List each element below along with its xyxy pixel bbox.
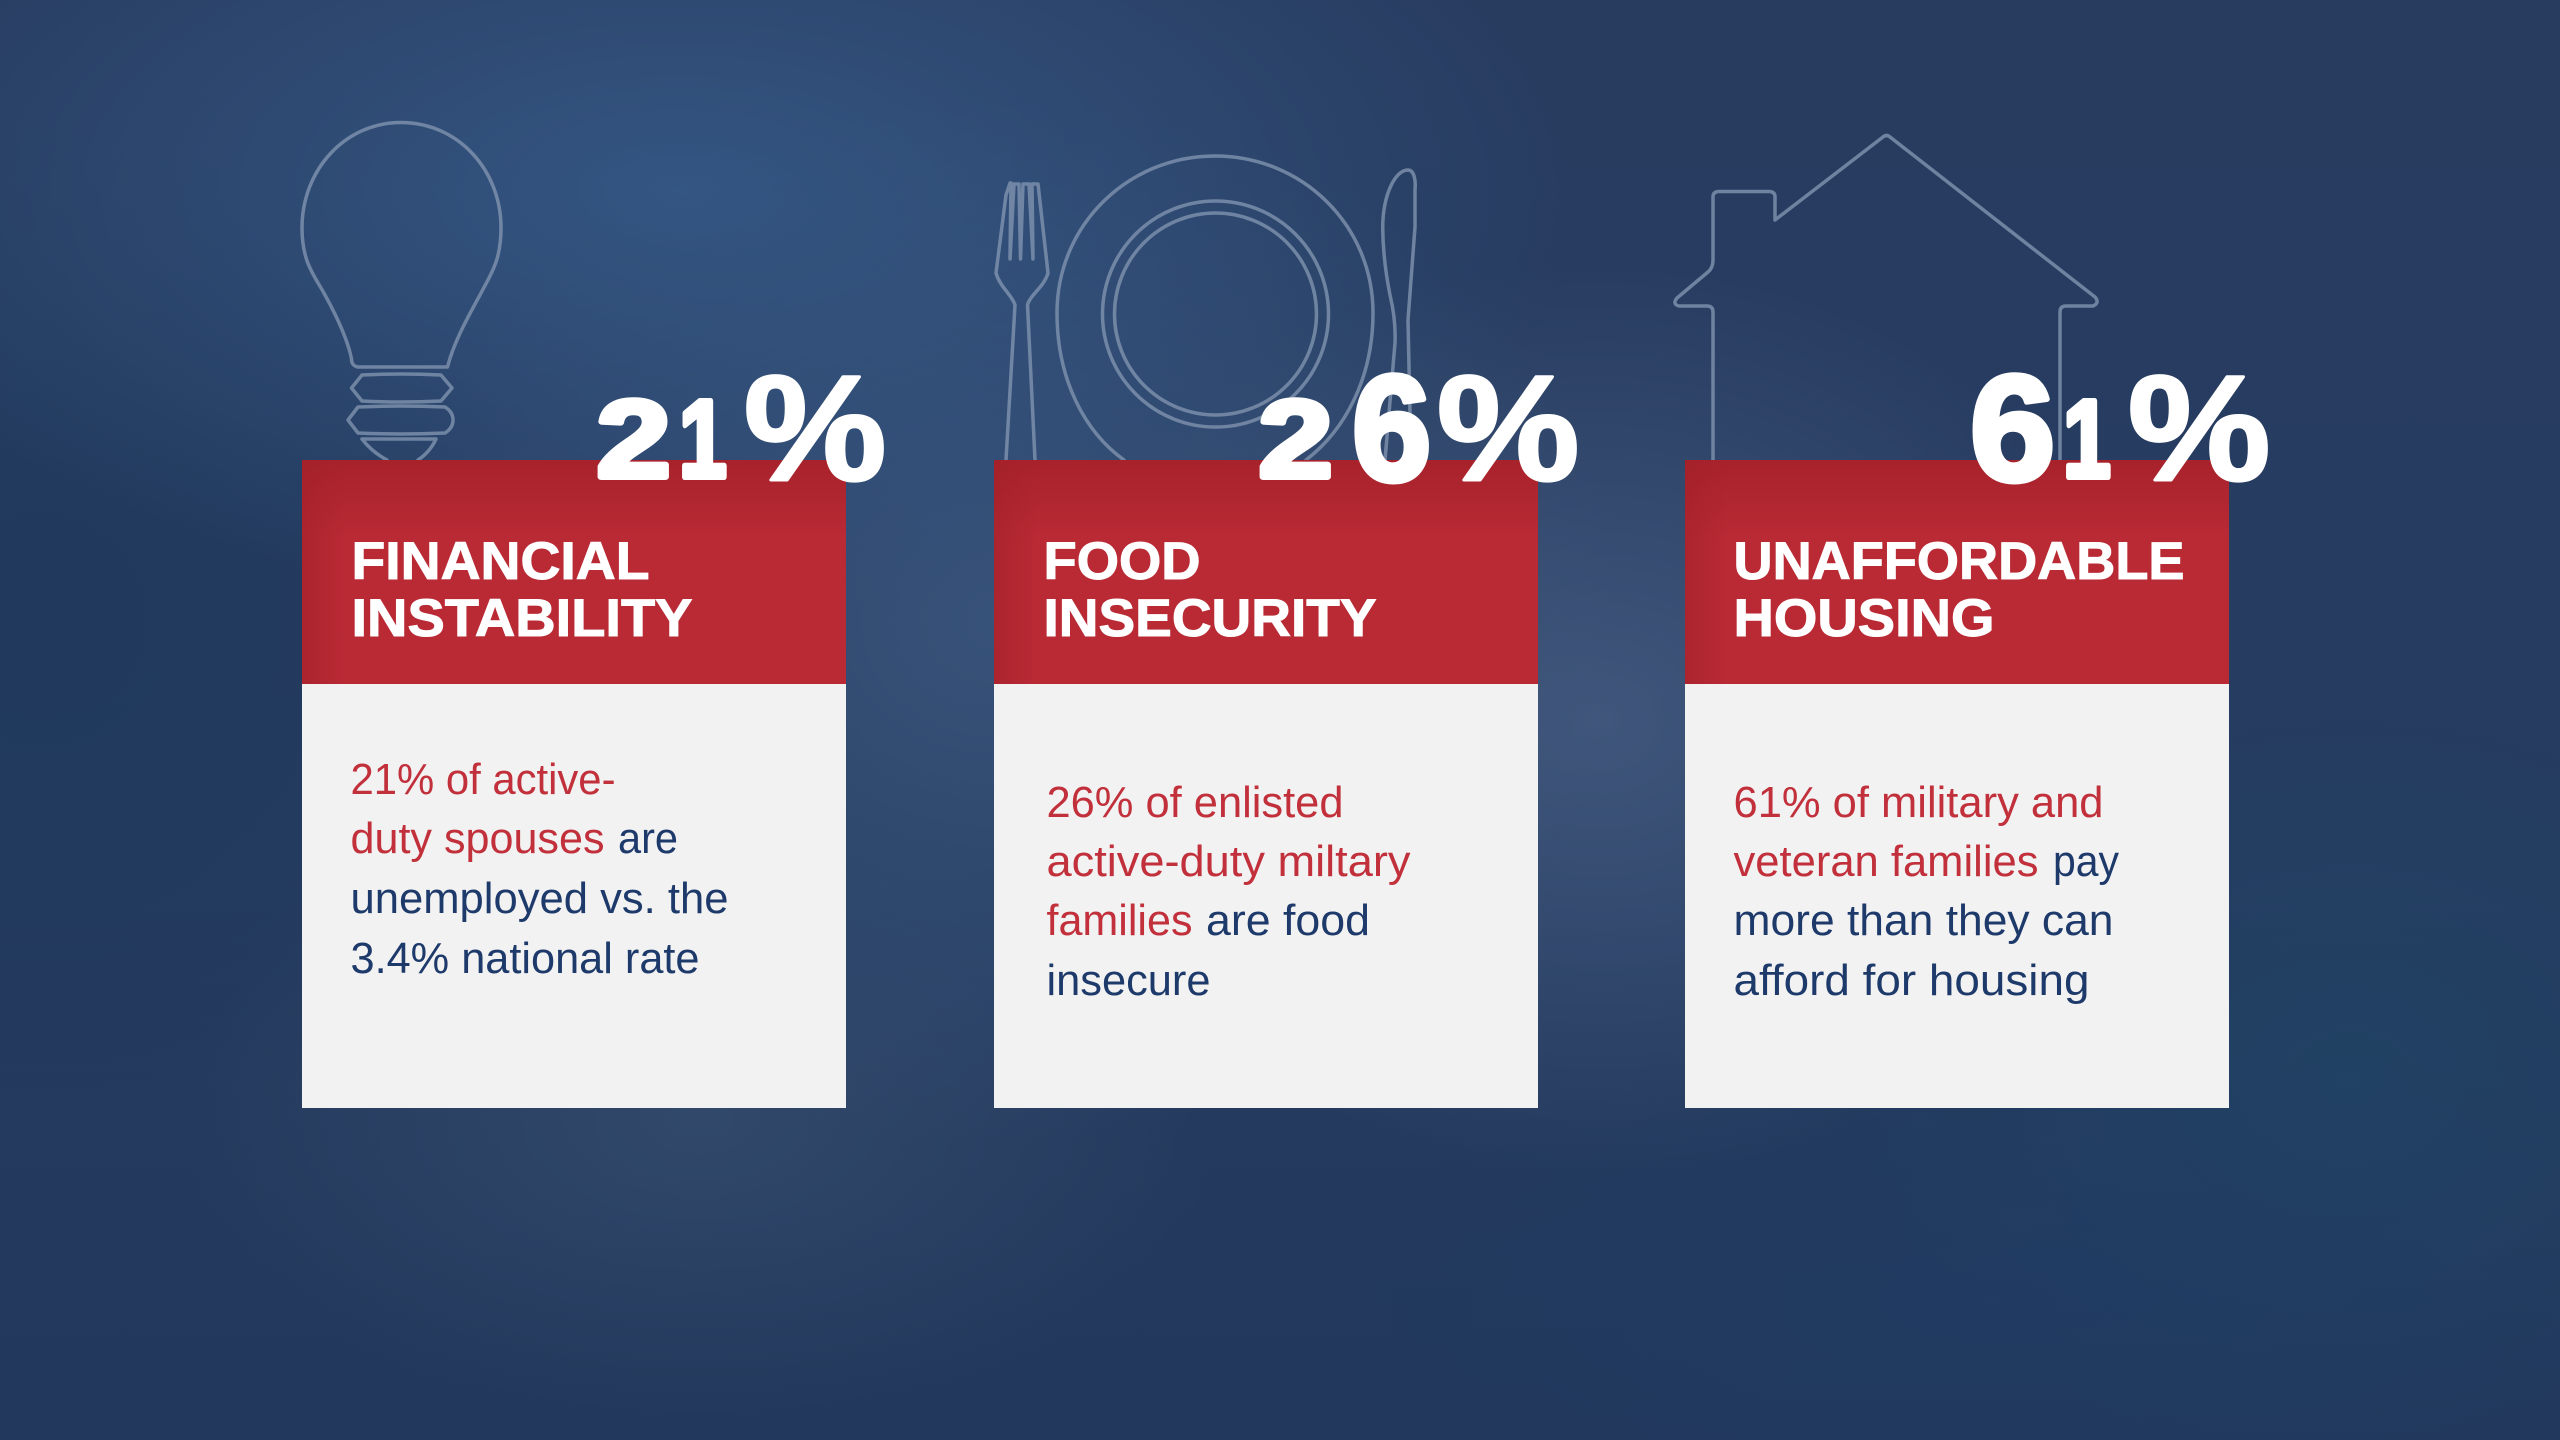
card body text: financial instability (302, 684, 846, 1108)
big number: 61% (1970, 344, 2271, 513)
card header: food insecurity (994, 460, 1538, 684)
panel: unaffordable housing (1675, 136, 2271, 1108)
card body text: financial instability: are (618, 814, 678, 863)
card body text: food insecurity (994, 684, 1538, 1108)
panel: food insecurity (994, 156, 1580, 1108)
big number: 61%: 6 (1970, 345, 2055, 513)
big number: 26%: 6 (1352, 346, 1431, 513)
big number: 61%: % (2128, 344, 2271, 512)
card header: financial instability: INSTABILITY (352, 589, 692, 648)
card body text: food insecurity: families (1046, 896, 1192, 945)
card body text: unaffordable housing: veteran families (1734, 837, 2038, 886)
big number: 21%: 2 (597, 377, 671, 500)
card header: unaffordable housing (1685, 460, 2229, 684)
card body text: financial instability: unemployed vs. the (350, 874, 728, 923)
big number: 26%: 2 (1259, 377, 1333, 500)
card body text: financial instability: duty spouses (350, 814, 604, 863)
card header: unaffordable housing: HOUSING (1734, 589, 1994, 648)
big number: 26%: % (1437, 344, 1580, 512)
icon: light bulb (302, 122, 501, 460)
icon: house outline (1675, 136, 2097, 460)
icon: plate with fork and knife (996, 156, 1415, 460)
card header: unaffordable housing: UNAFFORDABLE (1734, 532, 2184, 591)
card body text: food insecurity: insecure (1046, 956, 1210, 1005)
card header: food insecurity: FOOD (1044, 532, 1200, 591)
card body text: food insecurity: active-duty miltary (1046, 837, 1410, 886)
card body text: unaffordable housing: 61% of military and (1734, 778, 2104, 827)
big number: 26% (1259, 344, 1580, 513)
panel: financial instability (302, 122, 887, 1108)
card body text: food insecurity: are food (1206, 896, 1370, 945)
card body text: food insecurity: 26% of enlisted (1046, 778, 1344, 827)
big number: 61%: 1 (2063, 378, 2111, 500)
card header: financial instability (302, 460, 846, 684)
card header: food insecurity: INSECURITY (1044, 589, 1376, 648)
big number: 21%: 1 (679, 378, 727, 500)
big number: 21% (597, 344, 887, 512)
big number: 21%: % (744, 344, 887, 512)
card header: financial instability: FINANCIAL (352, 532, 650, 591)
card body text: financial instability: 21% of active- (350, 755, 616, 804)
card body text: unaffordable housing: more than they can (1734, 896, 2114, 945)
card body text: unaffordable housing: afford for housing (1734, 956, 2090, 1005)
card body text: financial instability: 3.4% national rate (350, 934, 700, 983)
card body text: unaffordable housing: pay (2053, 837, 2119, 886)
card body text: unaffordable housing (1685, 684, 2229, 1108)
